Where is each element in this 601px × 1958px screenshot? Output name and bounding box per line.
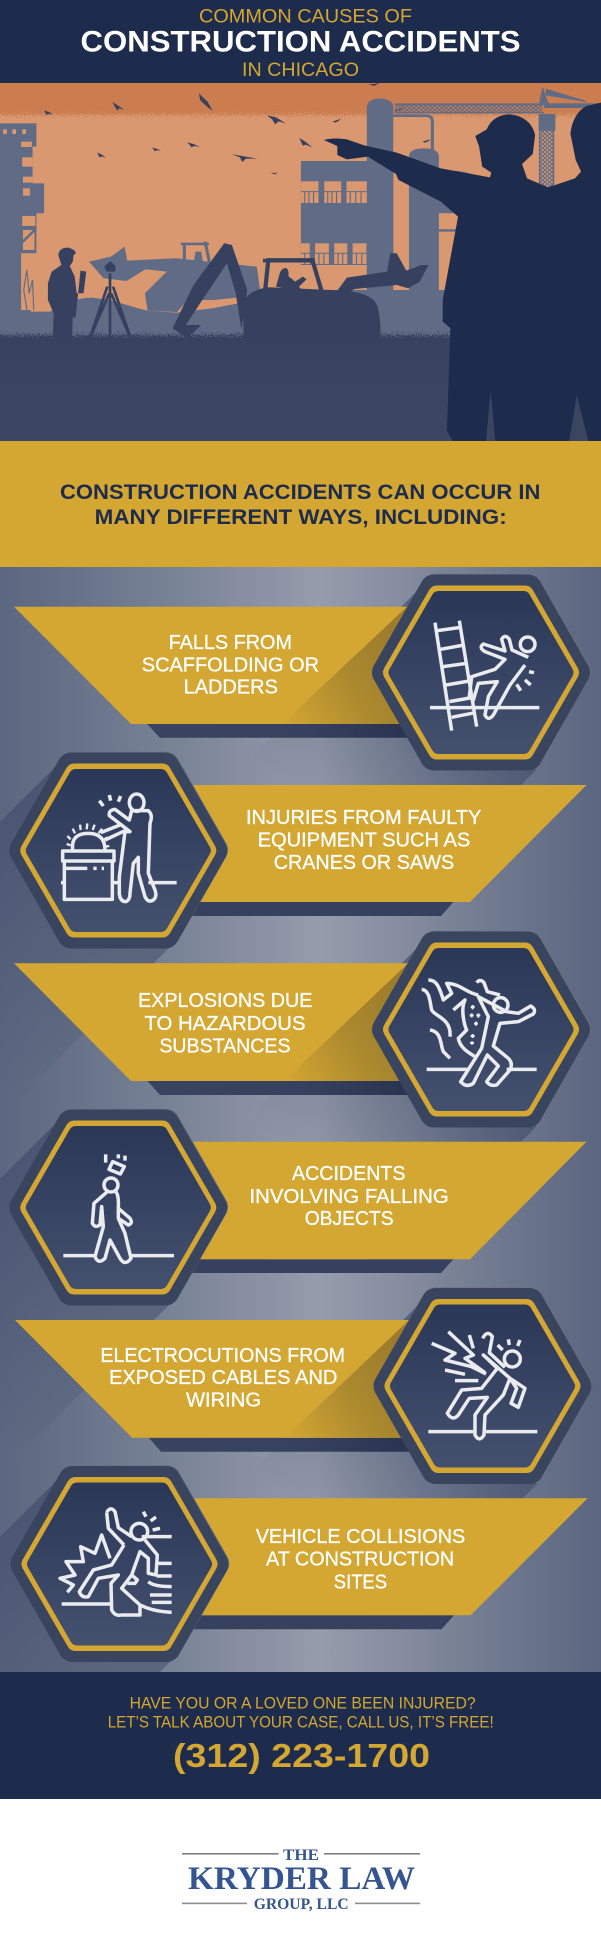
footer logo: The Kryder Law Group, LLC: THE [283,1847,319,1864]
foreground workers silhouette [324,103,601,441]
back ground hill [0,290,450,340]
icon: person falling from ladder [430,621,539,731]
title line: in chicago: IN CHICAGO [242,60,359,81]
hexagon 4 with falling object icon [23,1123,214,1292]
hero illustration: construction site silhouette [0,70,601,455]
footer logo: The Kryder Law Group, LLC [0,1799,601,1958]
phone number: (312) 223-1700 [173,1737,430,1774]
ribbon 3: explosions [14,963,415,1095]
ribbon text: LADDERS [184,677,278,699]
panel: causes list [0,567,601,1906]
cta question: HAVE YOU OR A LOVED ONE BEEN INJURED? [130,1694,476,1713]
ribbon text: INVOLVING FALLING [250,1186,449,1208]
chimney [367,99,393,299]
icon: pedestrian under falling object [63,1154,174,1262]
ribbon text: SUBSTANCES [159,1036,290,1058]
background refinery, crane and tower [0,88,601,340]
ribbon text: EXPOSED CABLES AND [109,1367,337,1389]
ribbon text: OBJECTS [305,1208,394,1230]
ribbon 1: falls [14,607,415,738]
ribbon text: WIRING [186,1390,261,1412]
ribbon text: INJURIES FROM FAULTY [246,807,481,829]
ribbon text: SCAFFOLDING OR [142,655,319,677]
ribbon text: EQUIPMENT SUCH AS [258,830,470,852]
footer logo: The Kryder Law Group, LLC: KRYDER LAW [188,1861,415,1897]
hexagon 5 with electrocution icon [388,1301,578,1470]
left tower [0,123,44,313]
backhoe cab [263,260,321,290]
ribbon text: ELECTROCUTIONS FROM [100,1345,345,1367]
ribbon text: VEHICLE COLLISIONS [256,1526,465,1548]
back wheel loader [89,242,261,312]
ribbon text [142,632,319,699]
ribbon text: FALLS FROM [169,632,292,654]
ribbon text: AT CONSTRUCTION [266,1549,454,1571]
intro text [60,481,540,529]
surveyor [48,248,86,340]
ribbon text [138,990,312,1058]
ribbon text: TO HAZARDOUS [144,1013,306,1035]
icon: worker at circular saw [61,794,177,902]
icon: person struck by vehicle [60,1509,172,1615]
ribbon 5: electrocutions [15,1320,416,1452]
ribbon 6: vehicle collisions [190,1498,588,1629]
ribbon text: EXPLOSIONS DUE [138,990,312,1012]
ribbon text [256,1526,465,1594]
front bucket arm [335,253,429,295]
ribbon text: ACCIDENTS [292,1163,406,1185]
hexagon 6 with collision icon [24,1479,215,1648]
ribbon text: SITES [334,1572,387,1594]
hexagon 1 with ladder fall icon [386,588,577,756]
intro text: CONSTRUCTION ACCIDENTS CAN OCCUR IN [60,481,540,504]
surveyor with tripod and backhoe [48,243,428,342]
lower fog [42,340,194,342]
ribbon text: CRANES OR SAWS [274,852,454,874]
call to action band [0,1672,601,1799]
grass band [0,330,450,382]
icon: person hit by electric shock [428,1332,537,1439]
hexagon long shadows [0,590,537,1906]
hexagon 2 with saw icon [23,766,214,934]
cta invitation: LET’S TALK ABOUT YOUR CASE, CALL US, IT’S FREE! [108,1713,494,1732]
header band [0,0,601,83]
ribbon 4: falling objects [190,1142,586,1273]
ribbon 2: faulty equipment [190,785,586,916]
ribbon text [250,1163,449,1230]
birds [44,83,431,174]
icon: person caught in explosion [422,980,537,1085]
second tower [409,148,439,297]
backhoe arm [172,243,247,338]
hexagon 3 with explosion icon [386,945,577,1114]
title line: construction accidents: CONSTRUCTION ACCIDENTS [80,26,520,59]
footer logo: The Kryder Law Group, LLC: GROUP, LLC [254,1896,349,1913]
ribbon text [100,1345,345,1412]
intro text: MANY DIFFERENT WAYS, INCLUDING: [95,506,507,529]
backhoe body [243,287,380,343]
building [301,161,393,265]
intro band [0,441,601,567]
ribbon text [246,807,481,874]
title line: common causes of: COMMON CAUSES OF [199,7,412,28]
tripod [90,261,132,338]
crane [395,88,601,189]
